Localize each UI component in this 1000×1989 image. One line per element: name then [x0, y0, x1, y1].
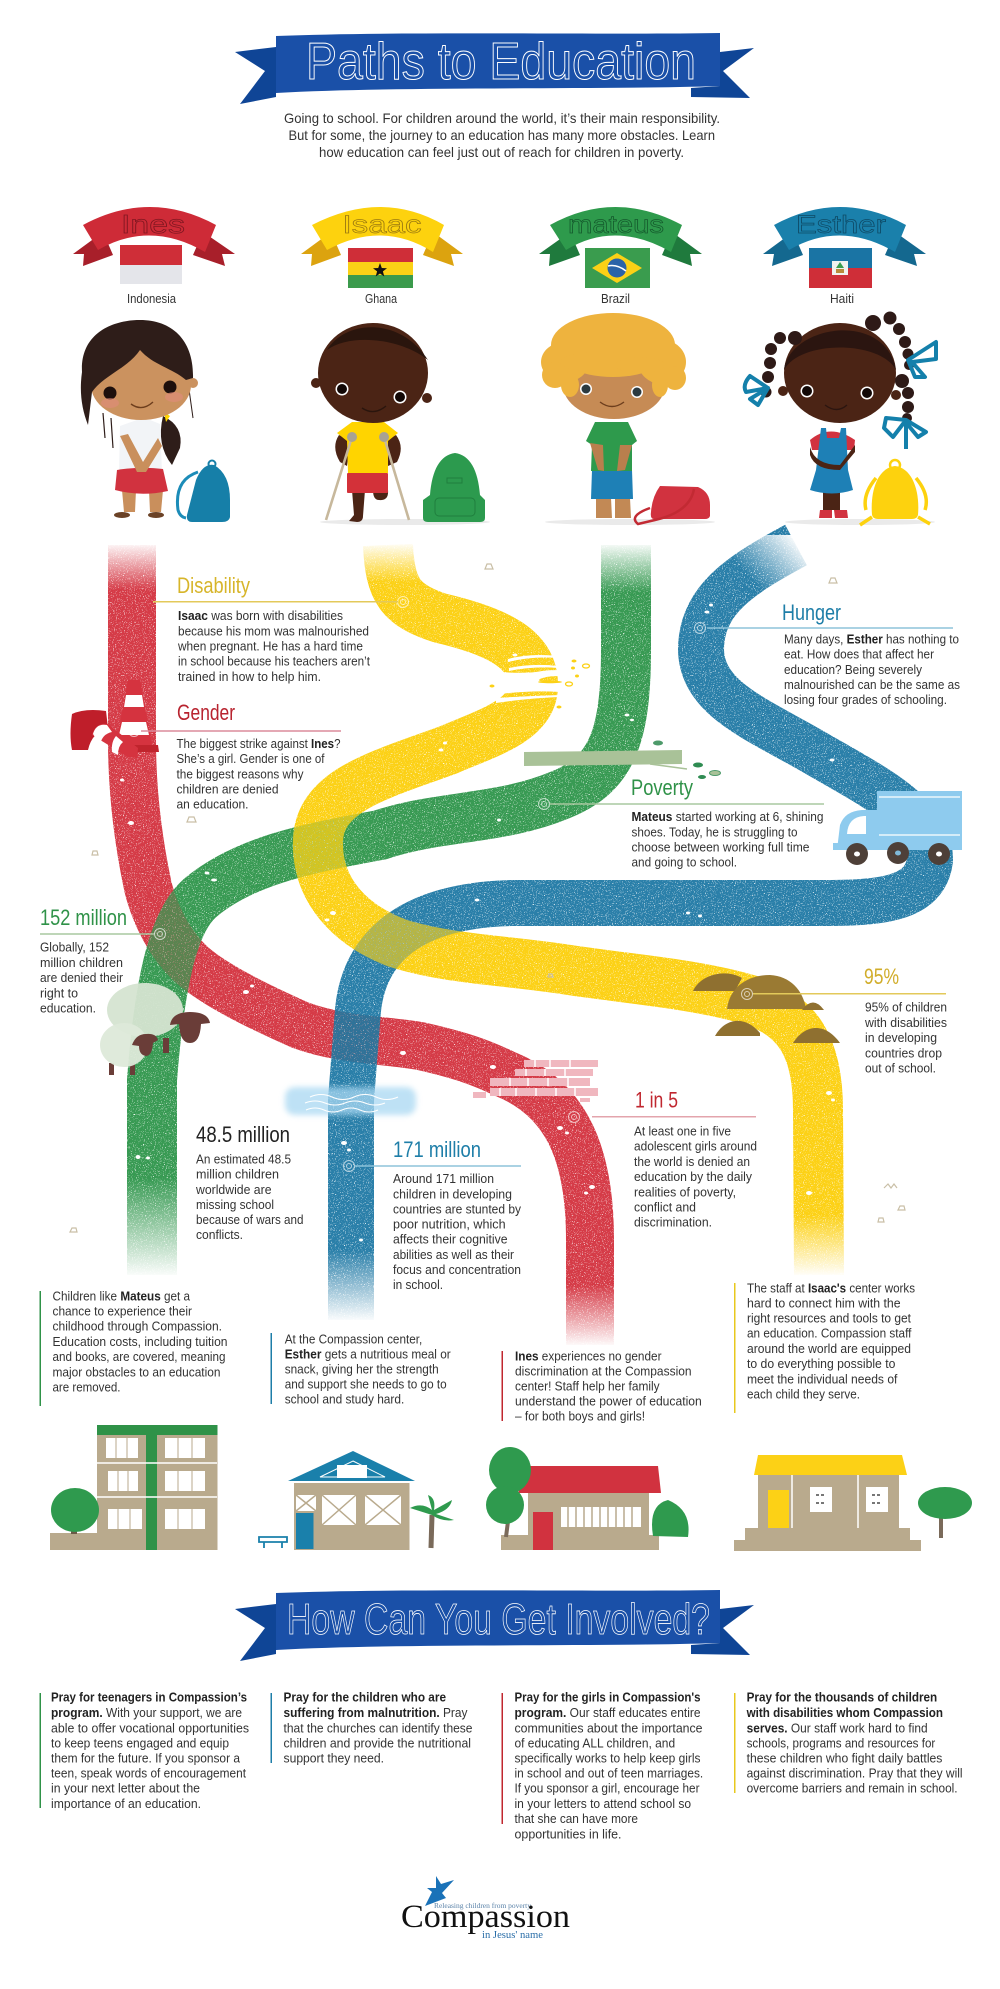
callout: Hunger: losing four grades of schooling. [784, 693, 947, 707]
obstacle: broken road gap [490, 655, 590, 708]
compassion note: Ines: understand the power of education [515, 1395, 702, 1409]
action column: teenagers: able to offer vocational opportunities [51, 1721, 249, 1735]
action column: girls: specifically works to help keep girls [514, 1751, 700, 1765]
callout: 95%: in developing [865, 1031, 937, 1045]
callout: 171 million [355, 1137, 522, 1292]
callout: 1 in 5: At least one in five [634, 1125, 731, 1139]
callout: Disability [153, 573, 398, 684]
callout: Gender: an education. [176, 798, 248, 812]
callout: Poverty [550, 775, 824, 869]
compassion note: Esther: school and study hard. [285, 1393, 404, 1407]
action column: malnutrition: that the churches can identify these [284, 1721, 473, 1735]
callout: 95%: countries drop [865, 1046, 942, 1060]
pebbles [70, 564, 905, 1232]
action column: teenagers: in your next letter about the [51, 1782, 200, 1796]
callout: Hunger: malnourished can be the same as [784, 678, 960, 692]
action column: malnutrition: suffering from malnutrition. Pray [284, 1706, 468, 1720]
callout: 152 million: are denied their [40, 971, 123, 985]
compassion note: Esther: Esther gets a nutritious meal or [285, 1347, 451, 1361]
compassion note: Isaac [734, 1281, 915, 1413]
Compassion logo: in Jesus' name [482, 1930, 543, 1941]
callout: 171 million: focus and concentration [393, 1263, 521, 1277]
callout: Poverty: choose between working full time [632, 840, 810, 854]
action column: girls: that she can have more [514, 1812, 638, 1826]
bench [259, 1537, 287, 1548]
compassion note: Isaac: The staff at Isaac's center works [747, 1281, 915, 1295]
compassion note: Isaac: hard to connect him with the [747, 1296, 901, 1310]
callout: 48.5 million: missing school [196, 1198, 274, 1212]
compassion note: Mateus: and books, are covered, meaning [52, 1350, 226, 1364]
callout: 171 million: countries are stunted by [393, 1202, 522, 1216]
callout: 1 in 5: discrimination. [634, 1215, 712, 1229]
name banner: Ines: Ines [121, 209, 185, 239]
bush [652, 1500, 689, 1537]
compassion note: Mateus: chance to experience their [52, 1305, 192, 1319]
callout: Gender: the biggest reasons why [176, 767, 304, 781]
callout: Disability: Isaac was born with disabilities [178, 609, 343, 623]
callout: 1 in 5: the world is denied an [634, 1155, 750, 1169]
obstacle: brick wall [473, 1060, 598, 1102]
building: Isaac's center [734, 1455, 972, 1551]
action column: girls: communities about the importance [514, 1721, 703, 1735]
backpack: blue [177, 460, 230, 522]
heading: Disability: Disability [177, 573, 250, 598]
callout: 152 million: right to [40, 986, 78, 1000]
action column: girls: program. Our staff educates entire [514, 1706, 701, 1720]
callout: 152 million: education. [40, 1001, 96, 1015]
compassion note: Isaac: around the world are equipped [747, 1342, 911, 1356]
name banner: Esther [763, 207, 926, 288]
callout: 171 million: in school. [393, 1278, 443, 1292]
callout: Gender: The biggest strike against Ines? [176, 737, 341, 751]
child: Isaac with crutches and backpack [311, 323, 490, 525]
callout: 1 in 5: conflict and [634, 1200, 696, 1214]
obstacle: rock mounds [693, 973, 840, 1043]
intro paragraph: Going to school. For children around the world, it’s their main responsibility. [284, 110, 720, 126]
compassion note: Ines: Ines experiences no gender [515, 1349, 662, 1363]
obstacle: traffic cones [70, 680, 159, 758]
action column: teenagers [40, 1691, 249, 1811]
action column: disabilities [734, 1691, 963, 1796]
obstacle: flood water [285, 1087, 416, 1115]
stat: 171 million: 171 million [393, 1137, 481, 1162]
Compassion logo: Compassion [401, 1899, 570, 1935]
white specks on roads [120, 604, 835, 1242]
intro paragraph: But for some, the journey to an education has many more obstacles. Learn [288, 127, 715, 143]
road: red (Ines) [132, 545, 590, 1345]
callout: 1 in 5 [592, 1088, 757, 1229]
road: yellow (Isaac) [318, 545, 819, 1275]
callout: Poverty: Mateus started working at 6, shining [632, 810, 824, 824]
compassion note: Mateus: Education costs, including tuition [52, 1335, 228, 1349]
action column: malnutrition: Pray for the children who are [284, 1691, 446, 1705]
compassion note: Esther: At the Compassion center, [285, 1332, 422, 1346]
callout: 95%: out of school. [865, 1061, 936, 1075]
building: Mateus's center [50, 1425, 218, 1550]
callout: 171 million: poor nutrition, which [393, 1218, 506, 1232]
Compassion logo [401, 1876, 570, 1941]
action column: girls: in school and out of teen marriages. [514, 1767, 703, 1781]
paths: four coloured roads [132, 545, 930, 1345]
lamb head [132, 1034, 158, 1056]
callout: 48.5 million: conflicts. [196, 1228, 243, 1242]
compassion note: Isaac: each child they serve. [747, 1387, 860, 1401]
stat: 48.5 million: 48.5 million [196, 1122, 290, 1147]
action column: teenagers: Pray for teenagers in Compassion’s [51, 1691, 247, 1705]
action column: disabilities: serves. Our staff work hard to find [747, 1721, 928, 1735]
callout: Poverty: shoes. Today, he is struggling to [632, 825, 798, 839]
compassion note: Isaac: an education. Compassion staff [747, 1327, 912, 1341]
callout: 152 million: Globally, 152 [40, 941, 109, 955]
tree [918, 1487, 972, 1538]
callout: 48.5 million: An estimated 48.5 [196, 1152, 291, 1166]
stat: 1 in 5: 1 in 5 [635, 1088, 678, 1113]
callout: 1 in 5: realities of poverty, [634, 1185, 736, 1199]
callout: 171 million: abilities as well as their [393, 1248, 514, 1262]
action column: girls: Pray for the girls in Compassion's [514, 1691, 701, 1705]
country label: Indonesia: Indonesia [127, 292, 176, 306]
heading: Gender: Gender [177, 700, 235, 725]
name banner: Ines [73, 207, 235, 284]
compassion note: Esther: snack, giving her the strength [285, 1363, 439, 1377]
callout: 171 million: Around 171 million [393, 1172, 494, 1186]
compassion note: Ines: discrimination at the Compassion [515, 1364, 692, 1378]
heading: Poverty: Poverty [631, 775, 693, 800]
action column: teenagers: program. With your support, we are [51, 1706, 242, 1720]
callout: 48.5 million [195, 1122, 304, 1242]
compassion note: Esther [270, 1332, 451, 1407]
stat: 95%: 95% [864, 964, 899, 989]
action column: girls: of educating ALL children, and [514, 1736, 675, 1750]
country label: Haiti: Haiti [830, 292, 854, 306]
compassion note: Mateus: Children like Mateus get a [52, 1290, 190, 1304]
action column: teenagers: importance of an education. [51, 1797, 201, 1811]
banner: How Can You Get Involved [235, 1590, 754, 1661]
country label: Ghana: Ghana [365, 292, 397, 306]
palm tree [410, 1495, 454, 1548]
trees [486, 1447, 531, 1537]
heading: Hunger: Hunger [782, 600, 841, 625]
child: Mateus with bag [541, 313, 715, 525]
action column: girls: in your letters to attend school so [514, 1797, 691, 1811]
action column: malnutrition: support they need. [284, 1751, 384, 1765]
action column: teenagers: to keep teens engaged and equip [51, 1736, 229, 1750]
callout: 48.5 million: worldwide are [195, 1183, 272, 1197]
obstacle: sheep [100, 983, 210, 1075]
callout: 171 million: children in developing [393, 1187, 512, 1201]
action column: teenagers: teen, speak words of encouragement [51, 1767, 246, 1781]
callout: 48.5 million: because of wars and [196, 1213, 304, 1227]
callout: Disability: when pregnant. He has a hard time [177, 640, 363, 654]
compassion note: Ines: center! Staff help her family [515, 1380, 660, 1394]
heading: How Can You Get Involved? [287, 1595, 710, 1644]
callout: Disability: because his mom was malnourished [178, 624, 369, 638]
callout: Hunger [707, 600, 960, 707]
callout: Disability: trained in how to help him. [178, 670, 321, 684]
compassion note: Isaac: right resources and tools to get [747, 1312, 912, 1326]
action column: disabilities: these children who fight daily battles [747, 1751, 942, 1765]
intro paragraph [284, 110, 720, 160]
compassion note: Mateus [40, 1290, 228, 1406]
sheep head [170, 1012, 210, 1043]
callout: 171 million: affects their cognitive [393, 1233, 508, 1247]
bag: red [635, 486, 710, 524]
flag: Brazil [585, 248, 650, 288]
callout: Hunger: education? Being severely [784, 663, 923, 677]
action column: girls: If you sponsor a girl, encourage her [514, 1782, 700, 1796]
action column: disabilities: Pray for the thousands of children [747, 1691, 937, 1705]
name banner: Isaac: Isaac [342, 211, 422, 239]
flag: Ghana [348, 248, 413, 288]
logo figure [425, 1876, 454, 1906]
bows [745, 342, 936, 449]
name banner: Mateus: mateus [568, 211, 664, 239]
callout: Gender: children are denied [176, 782, 279, 796]
country label: Brazil: Brazil [601, 292, 630, 306]
compassion note: Mateus: childhood through Compassion. [52, 1320, 222, 1334]
name banner: Isaac [301, 207, 463, 288]
child: Esther with bows and backpack [745, 312, 936, 525]
title: Paths to Education [306, 33, 696, 91]
Compassion logo: Releasing children from poverty [434, 1901, 531, 1910]
callout: 95%: 95% of children [865, 1001, 947, 1015]
flag: Indonesia [120, 245, 182, 284]
action column: disabilities: against discrimination. Pray that they will [747, 1767, 963, 1781]
callout: Disability: in school because his teachers aren’t [178, 655, 370, 669]
compassion note: Mateus: are removed. [52, 1380, 120, 1394]
name banner: Esther: Esther [796, 211, 886, 239]
truck wheels [846, 842, 950, 865]
name banner: Mateus [539, 207, 702, 288]
callout: Gender: She’s a girl. Gender is one of [176, 752, 325, 766]
compassion note: Esther: and support she needs to go to [285, 1378, 447, 1392]
callout: 1 in 5: adolescent girls around [634, 1140, 757, 1154]
braids [760, 312, 914, 423]
callout: 95% [753, 964, 947, 1075]
building: Ines's center [486, 1447, 689, 1550]
title banner [235, 33, 754, 104]
compassion note: Isaac: meet the individual needs of [747, 1372, 898, 1386]
callout: 1 in 5: education by the daily [634, 1170, 753, 1184]
obstacle: fallen log [524, 740, 720, 779]
road: blue (Esther) [351, 545, 930, 1320]
callout: 152 million: million children [40, 956, 123, 970]
callout: 48.5 million: million children [196, 1168, 279, 1182]
action column: malnutrition: children and provide the nutritional [284, 1736, 471, 1750]
action column: girls: opportunities in life. [514, 1827, 622, 1841]
compassion note: Ines: – for both boys and girls! [515, 1410, 645, 1424]
callout: 95%: with disabilities [864, 1016, 947, 1030]
callout: Poverty: and going to school. [632, 855, 737, 869]
action column: teenagers: them for the future. If you sponsor a [51, 1751, 240, 1765]
intro paragraph: how education can feel just out of reach for children in poverty. [319, 144, 684, 160]
action column: disabilities: with disabilities whom Compassion [746, 1706, 943, 1720]
flag: Haiti [809, 248, 872, 288]
compassion note: Mateus: major obstacles to an education [52, 1365, 221, 1379]
tree [51, 1488, 99, 1534]
compassion note: Ines [502, 1349, 702, 1424]
backpack: yellow [860, 460, 930, 525]
callout: Gender [141, 700, 341, 812]
callout: Hunger: Many days, Esther has nothing to [784, 632, 959, 646]
obstacle: truck [833, 791, 962, 865]
path markers [128, 596, 752, 1172]
action column: girls [502, 1691, 703, 1841]
compassion note: Isaac: to do everything possible to [747, 1357, 895, 1371]
callout: Hunger: eat. How does that affect her [784, 648, 934, 662]
action column: malnutrition [270, 1691, 473, 1765]
action column: disabilities: overcome barriers and remain in school. [747, 1782, 958, 1796]
child: Ines with backpack [81, 320, 230, 522]
building: Esther's center [259, 1451, 454, 1550]
action column: disabilities: schools, programs and resources for [747, 1736, 935, 1750]
stat: 152 million: 152 million [40, 905, 127, 930]
road: green (Mateus) [152, 545, 626, 1275]
backpack: green [423, 453, 485, 522]
callout: 152 million [40, 905, 154, 1015]
